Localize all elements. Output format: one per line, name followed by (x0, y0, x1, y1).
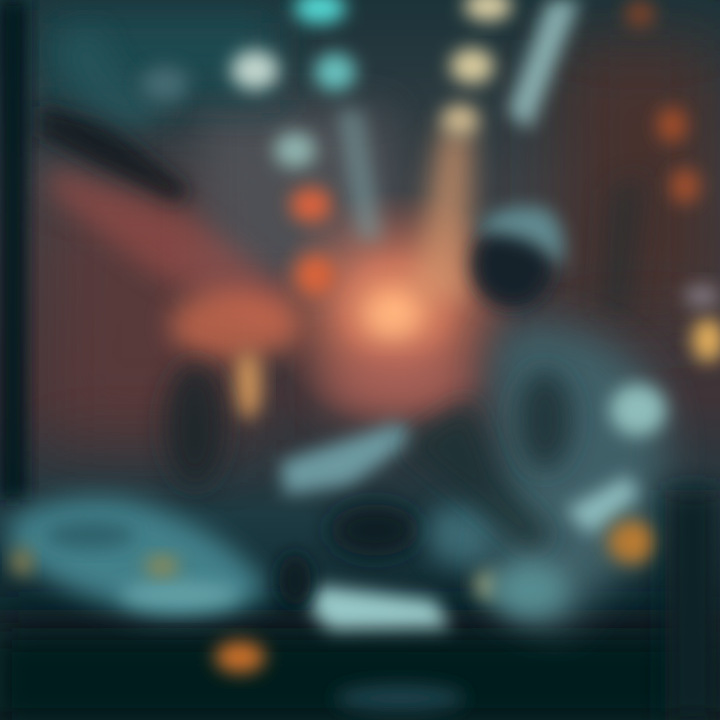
orange floor light (215, 641, 265, 673)
right lower dark (665, 490, 720, 720)
orange lanterns (234, 0, 700, 419)
figure shadow (517, 370, 573, 470)
figure orange accent (608, 520, 656, 564)
teal table shape left (10, 498, 270, 616)
figure arm (400, 400, 555, 555)
figure shoulder highlight (610, 384, 666, 436)
figure lower teal (492, 562, 568, 618)
teal mid shapes (279, 422, 505, 630)
figure: robot (400, 206, 667, 630)
right bright yellow light (692, 318, 720, 362)
left dark edge (0, 0, 26, 500)
figure hair (475, 206, 564, 270)
ceiling lights (141, 0, 512, 168)
upper-left teal arch (60, 30, 180, 130)
small distant dark figure (165, 363, 225, 487)
central explosion glow (170, 130, 525, 430)
right pale light (684, 284, 720, 308)
figure forearm highlight (565, 475, 640, 535)
figure torso (490, 323, 667, 630)
streak light upper right (508, 0, 580, 130)
bottom teal reflection (335, 684, 465, 712)
bottom dark foreground (0, 640, 720, 720)
right dark columns (600, 175, 645, 320)
figure head (472, 223, 552, 307)
pale light column (338, 110, 382, 240)
red diagonal streak (50, 165, 290, 340)
dark diagonal roof band (40, 105, 190, 205)
